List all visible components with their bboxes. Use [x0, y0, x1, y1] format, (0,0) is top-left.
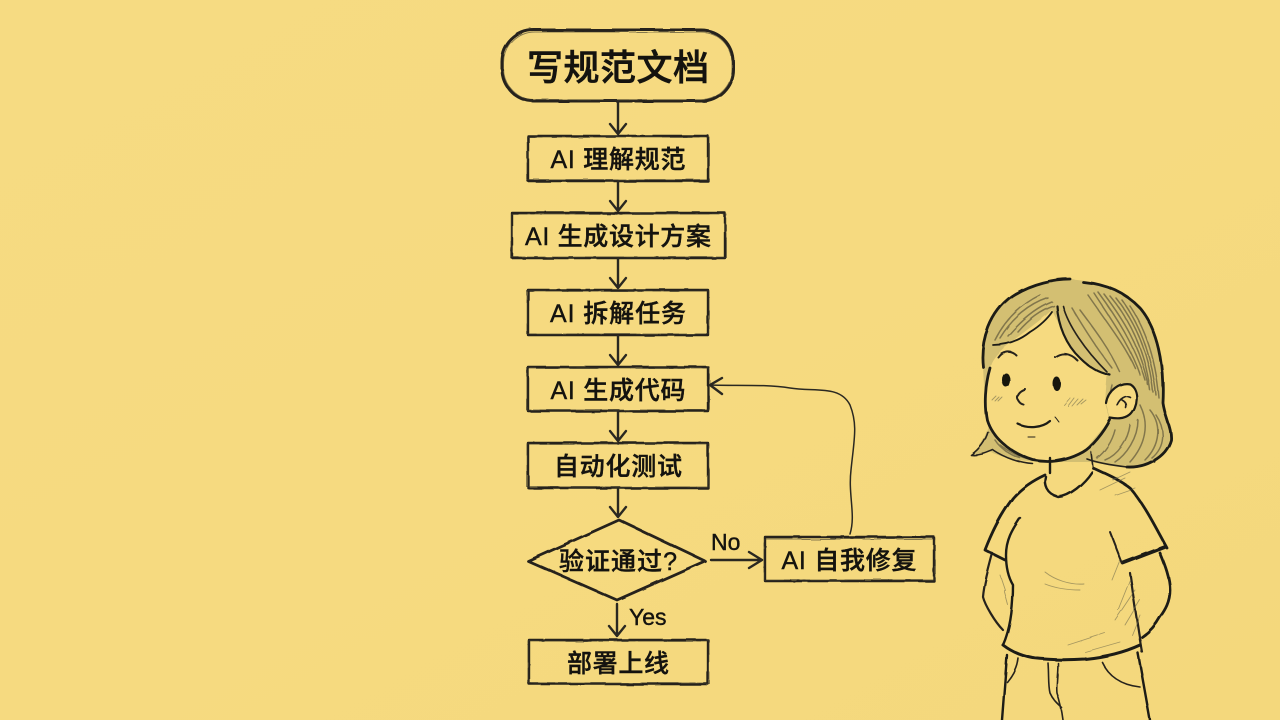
step: AI 生成代码	[527, 367, 709, 411]
step: AI 生成设计方案: AI 生成设计方案	[525, 223, 711, 251]
step: 部署上线	[528, 640, 709, 684]
flowchart	[502, 30, 935, 684]
t-shirt	[985, 475, 1045, 560]
step: 自动化测试	[527, 443, 709, 488]
face	[985, 351, 1137, 461]
body	[983, 452, 1170, 720]
start node: 写规范文档: 写规范文档	[527, 47, 709, 88]
decision: 验证通过?	[528, 520, 705, 600]
step: AI 生成代码: AI 生成代码	[550, 377, 686, 405]
fringe	[993, 312, 1052, 345]
step: AI 自我修复: AI 自我修复	[782, 547, 916, 575]
nose	[1017, 389, 1025, 405]
arrow: No branch	[711, 552, 762, 568]
step: AI 拆解任务: AI 拆解任务	[550, 300, 686, 328]
mouth	[1018, 421, 1050, 427]
arrow: start to understand	[610, 102, 626, 134]
arrow: feedback loop to code generation	[710, 378, 855, 534]
blush	[992, 396, 1086, 406]
eyes	[1002, 373, 1010, 387]
hair outline	[982, 279, 1070, 367]
step: AI 生成设计方案	[511, 213, 726, 258]
arrow: code to test	[610, 412, 626, 441]
start node: 写规范文档	[502, 30, 733, 101]
step: AI 理解规范: AI 理解规范	[550, 146, 686, 174]
shirt shading	[1000, 472, 1140, 652]
neck and collar	[1045, 458, 1092, 497]
hair hatching	[995, 292, 1163, 462]
face outline	[985, 368, 1110, 461]
ear	[1106, 384, 1137, 419]
hair	[971, 279, 1172, 467]
eyebrows	[998, 351, 1077, 360]
decision: 验证通过?: 验证通过?	[559, 548, 677, 576]
step: AI 拆解任务	[527, 290, 709, 335]
arrow: understand to design	[610, 182, 626, 211]
arms	[983, 555, 1003, 630]
arrow: tasks to code	[610, 336, 626, 365]
arrow: design to tasks	[610, 259, 626, 288]
step: AI 自我修复	[764, 537, 935, 581]
step: AI 理解规范	[527, 136, 709, 181]
character: girl with short hair	[971, 279, 1172, 720]
arrow: Yes branch	[609, 604, 625, 636]
label: No: No	[711, 529, 740, 555]
face skin area	[986, 310, 1110, 461]
label: Yes: Yes	[629, 604, 667, 630]
step: 自动化测试: 自动化测试	[554, 453, 682, 481]
pants	[1002, 653, 1150, 720]
step: 部署上线: 部署上线	[567, 650, 669, 678]
arrow: test to decision	[610, 489, 626, 517]
